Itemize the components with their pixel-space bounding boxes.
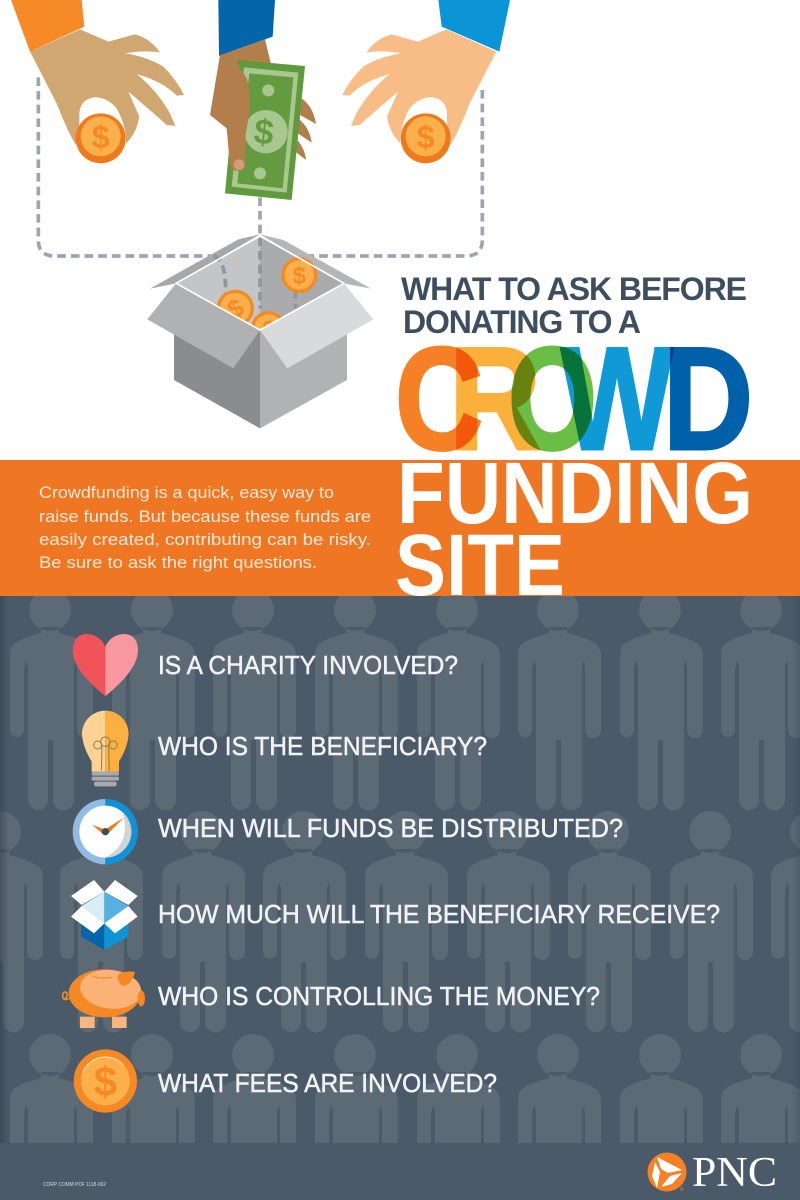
- middle hand palm and thumb: [210, 50, 250, 171]
- heading: crowd multicolour word: W: [561, 317, 673, 480]
- question 1: IS A CHARITY INVOLVED?: [158, 650, 458, 680]
- coins in box: $: [258, 315, 278, 345]
- heading: crowd multicolour word: [395, 317, 753, 480]
- coins in box: $: [223, 294, 249, 325]
- icon: dollar coin: [74, 1049, 137, 1113]
- question 2: WHO IS THE BENEFICIARY?: [158, 731, 487, 761]
- heading: funding site: FUNDING: [397, 445, 753, 542]
- intro paragraph: Crowdfunding is a quick, easy way to: [39, 483, 334, 502]
- heading: what to ask before donating to a: [401, 271, 747, 340]
- middle sleeve: [218, 0, 275, 56]
- logo: PNC: [648, 1150, 777, 1196]
- coins in box: [217, 290, 282, 329]
- icon: open blue box: [71, 880, 138, 950]
- panel: dark slate questions background: [0, 596, 800, 1200]
- icon: piggy bank: [63, 967, 145, 1028]
- dollar bill: [225, 60, 305, 200]
- dollar bill: $: [252, 112, 276, 153]
- icon: dollar coin: $: [94, 1059, 117, 1105]
- icon: light bulb: [82, 711, 129, 786]
- middle hand fingers: [219, 39, 316, 160]
- left hand: [30, 29, 184, 145]
- icon: heart: [73, 634, 138, 696]
- heading: what to ask before donating to a: DONATING TO A: [403, 304, 641, 340]
- box interior: [177, 236, 343, 330]
- question 6: WHAT FEES ARE INVOLVED?: [158, 1068, 497, 1098]
- heading: funding site: SITE: [395, 517, 565, 614]
- question 3: WHEN WILL FUNDS BE DISTRIBUTED?: [158, 813, 623, 843]
- intro paragraph: Be sure to ask the right questions.: [39, 553, 317, 572]
- intro paragraph: [39, 483, 371, 572]
- logo mark: ®: [680, 1186, 684, 1193]
- box back flaps: [150, 234, 371, 289]
- falling coin: [281, 257, 317, 293]
- box front flaps: [147, 236, 373, 368]
- background pattern: rows of people: [0, 589, 800, 1200]
- right sleeve: [438, 0, 510, 52]
- heading: what to ask before donating to a: WHAT TO ASK BEFORE: [401, 271, 747, 307]
- right coin: $: [417, 119, 435, 155]
- dashed path inside box: [213, 237, 295, 308]
- right hand: [342, 29, 496, 145]
- heading: crowd multicolour word: O: [508, 317, 597, 480]
- panel: white header background: [0, 0, 800, 460]
- question 5: WHO IS CONTROLLING THE MONEY?: [158, 981, 600, 1011]
- box body: [174, 330, 347, 428]
- dashed money paths: [38, 77, 482, 308]
- middle thumbnail: [234, 159, 244, 170]
- footer code: CORP COMM PDF 1118-062: [43, 1182, 106, 1188]
- heading: funding site: [395, 445, 753, 614]
- logo wordmark: PNC: [692, 1150, 777, 1196]
- question 4: HOW MUCH WILL THE BENEFICIARY RECEIVE?: [158, 899, 720, 929]
- left coin: [76, 113, 126, 163]
- panel: orange intro band: [0, 460, 800, 596]
- falling coin: $: [293, 263, 306, 290]
- heading: crowd multicolour word: D: [663, 317, 753, 480]
- heading: crowd multicolour word: R: [449, 317, 541, 480]
- right coin: [401, 113, 451, 163]
- left sleeve: [11, 0, 84, 52]
- heading: crowd multicolour word: C: [395, 317, 483, 480]
- left coin: $: [92, 119, 110, 155]
- intro paragraph: raise funds. But because these funds are: [39, 507, 371, 526]
- icon: clock: [73, 799, 138, 864]
- intro paragraph: easily created, contributing can be risky.: [39, 530, 371, 549]
- illustration: hands dropping money into a box: [11, 0, 510, 428]
